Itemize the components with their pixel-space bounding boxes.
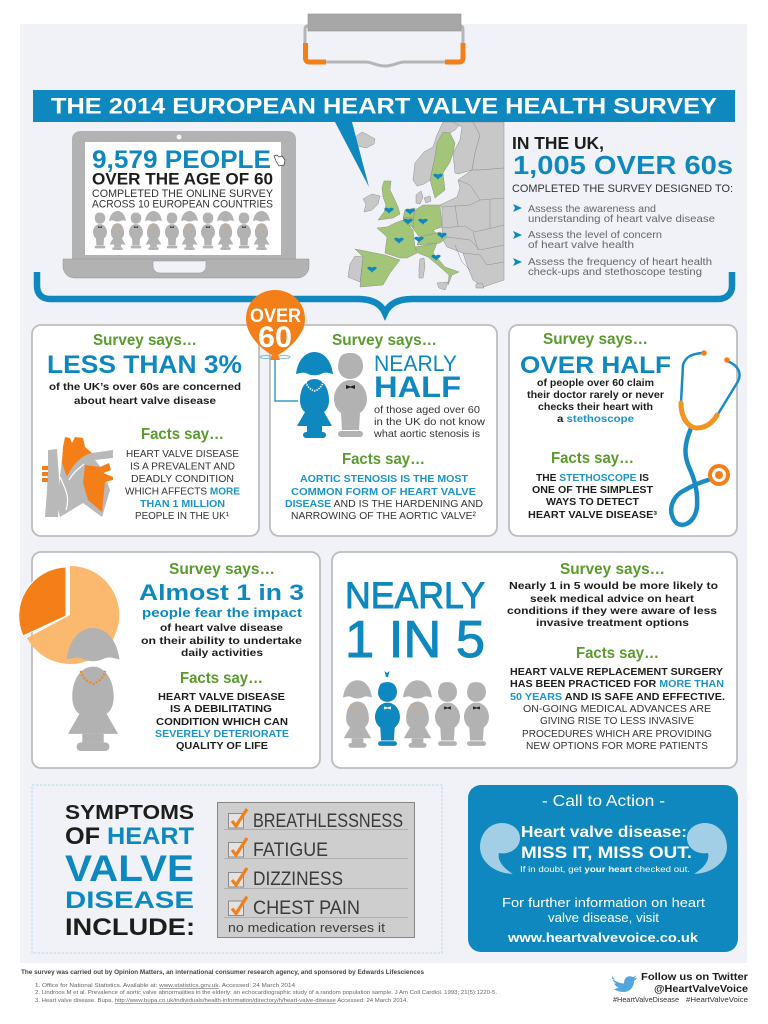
panel: less than 3%: Survey says… xyxy=(93,332,197,349)
text: completed the online survey: COMPLETED THE ONLINE SURVEY xyxy=(92,188,274,200)
panel: call to action: valve disease, visit xyxy=(548,911,660,925)
bullet list of aims: Assess the awareness and xyxy=(528,203,656,215)
panel: less than 3%: of the UK’s over 60s are concerned xyxy=(49,381,241,393)
text: completed the online survey: ACROSS 10 EUROPEAN COUNTRIES xyxy=(92,198,273,210)
panel: almost 1 in 3: HEART VALVE DISEASE xyxy=(158,692,285,703)
panel: almost 1 in 3 xyxy=(32,552,320,768)
heading: symptoms of heart valve disease include: INCLUDE: xyxy=(65,914,195,941)
laptop panel xyxy=(63,131,309,278)
panel: less than 3%: IS A PREVALENT AND xyxy=(130,462,235,472)
panel: over half: OVER HALF xyxy=(520,352,671,379)
footer: survey note and references: The survey was carried out by Opinion Matters, an international consumer research agency, and sponsored by Edwards Lifesciences xyxy=(21,970,425,976)
panel: almost 1 in 3: Almost 1 in 3 xyxy=(139,580,304,605)
panel: over half: WAYS TO DETECT xyxy=(546,497,639,508)
panel: less than 3%: Facts say… xyxy=(141,426,224,443)
icon: clipboard clip xyxy=(305,14,463,66)
panel: nearly half: of those aged over 60 xyxy=(374,404,480,416)
text: UK survey summary: COMPLETED THE SURVEY DESIGNED TO: xyxy=(512,183,733,195)
green countries xyxy=(430,132,455,198)
checklist: BREATHLESSNESS xyxy=(253,811,403,832)
panel: less than 3%: WHICH AFFECTS MORE xyxy=(125,486,240,498)
panel: over half: of people over 60 claim xyxy=(537,377,654,389)
panel: call to action: - Call to Action - xyxy=(542,793,665,810)
panel: nearly half xyxy=(270,325,497,536)
panel: nearly 1 in 5: NEW OPTIONS FOR MORE PATIENTS xyxy=(526,741,708,752)
panel: nearly half: NARROWING OF THE AORTIC VALVE² xyxy=(291,511,477,522)
icon: over 60 balloon: OVER xyxy=(250,306,301,327)
panel: over half: Survey says… xyxy=(543,331,648,348)
panel: less than 3% xyxy=(32,325,259,536)
panel: nearly 1 in 5: Facts say… xyxy=(576,645,659,662)
icon: pointer hand xyxy=(274,155,285,166)
panel: nearly 1 in 5: NEARLY xyxy=(345,575,485,616)
icon: quotation marks xyxy=(480,823,727,874)
panel: nearly 1 in 5: ON-GOING MEDICAL ADVANCES ARE xyxy=(523,704,711,715)
icon: twitter bird xyxy=(612,973,637,992)
bracket linking survey to findings xyxy=(37,272,732,313)
panel: over half: ONE OF THE SIMPLEST xyxy=(532,485,653,496)
panel: symptoms xyxy=(32,785,442,953)
footer: survey note and references: 1. Office for National Statistics. Available at: www.statistics.gov.uk . Accessed: 24 March 2014 xyxy=(35,983,295,989)
bullet list of aims xyxy=(513,203,715,278)
checklist: FATIGUE xyxy=(253,840,328,861)
checklist: CHEST PAIN xyxy=(253,898,360,919)
figure: woman with necklace xyxy=(67,628,119,751)
figures: woman and man xyxy=(296,352,367,438)
heading: 9,579 people: 9,579 PEOPLE xyxy=(92,146,271,174)
panel: nearly half: NEARLY xyxy=(374,351,457,376)
icon: over 60 balloon: 60 xyxy=(258,321,292,354)
panel: over half: Facts say… xyxy=(551,450,634,467)
panel: nearly 1 in 5: invasive treatment options xyxy=(536,617,689,629)
small people row xyxy=(93,211,270,250)
panel: almost 1 in 3: SEVERELY DETERIORATE xyxy=(155,729,289,740)
panel: almost 1 in 3: CONDITION WHICH CAN xyxy=(156,717,288,728)
panel: call to action: If in doubt, get your heart checked out. xyxy=(520,864,690,874)
panel: over half xyxy=(509,325,740,536)
icon: stethoscope xyxy=(671,350,740,525)
text: completed the online survey xyxy=(92,188,274,210)
panel: less than 3%: LESS THAN 3% xyxy=(47,351,242,379)
panel: almost 1 in 3: daily activities xyxy=(181,647,263,659)
title banner with callout tail xyxy=(33,90,735,187)
country borders xyxy=(442,180,504,270)
panel: nearly 1 in 5: conditions if they were aware of less xyxy=(507,605,717,617)
panel: nearly half: COMMON FORM OF HEART VALVE xyxy=(291,487,476,498)
panel: less than 3%: THAN 1 MILLION xyxy=(140,499,225,510)
panel: nearly half: AORTIC STENOSIS IS THE MOST xyxy=(300,474,468,485)
panel: nearly 1 in 5: Nearly 1 in 5 would be more likely to xyxy=(509,580,718,592)
text: UK survey summary: IN THE UK, xyxy=(512,133,604,153)
panel: nearly 1 in 5: PROCEDURES WHICH ARE PROVIDING xyxy=(522,729,712,740)
panel: over half: a stethoscope xyxy=(557,413,634,425)
heading: symptoms of heart valve disease include xyxy=(65,802,195,941)
map of Europe xyxy=(348,122,504,290)
footer: survey note and references: 2. Lindroos M et al. Prevalence of aortic valve abnormalities in the elderly: an echocardiographic study of a random population sample. J Am Coll Cardiol. 1993; 21(5):1220-5. xyxy=(35,990,498,996)
text: UK survey summary xyxy=(512,133,733,278)
checklist xyxy=(218,802,414,938)
panel: almost 1 in 3: QUALITY OF LIFE xyxy=(176,741,268,752)
panel: nearly half: what aortic stenosis is xyxy=(373,428,480,440)
text: follow us on twitter: Follow us on Twitter xyxy=(641,971,748,983)
footer: survey note and references xyxy=(21,970,498,1004)
panel: almost 1 in 3: people fear the impact xyxy=(142,605,303,620)
checklist: no medication reverses it xyxy=(228,920,385,935)
panel: call to action xyxy=(468,785,738,952)
title banner with callout tail: THE 2014 EUROPEAN HEART VALVE HEALTH SURVEY xyxy=(51,94,717,118)
icon: over 60 balloon xyxy=(246,290,305,401)
panel: over half: HEART VALVE DISEASE³ xyxy=(528,510,658,521)
text: follow us on twitter xyxy=(613,971,748,1004)
bullet list of aims: Assess the frequency of heart health xyxy=(528,256,712,268)
text: follow us on twitter: #HeartValveDisease xyxy=(613,995,679,1004)
bullet list of aims: understanding of heart valve disease xyxy=(528,213,715,225)
bullet list of aims: of heart valve health xyxy=(528,239,634,251)
text: follow us on twitter: @HeartValveVoice xyxy=(654,983,748,995)
panel: call to action: MISS IT, MISS OUT. xyxy=(521,843,692,862)
panel: nearly 1 in 5: GIVING RISE TO LESS INVASIVE xyxy=(540,716,694,727)
panel: call to action: For further information on heart xyxy=(502,896,706,910)
panel: almost 1 in 3: on their ability to undertake xyxy=(141,635,302,647)
bullet list of aims: check-ups and stethoscope testing xyxy=(528,266,702,278)
panel: nearly 1 in 5: HAS BEEN PRACTICED FOR MORE THAN xyxy=(510,679,724,690)
panel: almost 1 in 3: Survey says… xyxy=(169,561,275,578)
iceland xyxy=(355,132,375,148)
footer: survey note and references: 3. Heart valve disease. Bupa. http://www.bupa.co.uk/individuals/health-information/directory/h/heart-valve-disease Accessed: 24 March 2014. xyxy=(35,998,409,1004)
text: UK survey summary: 1,005 OVER 60s xyxy=(513,150,733,180)
panel: almost 1 in 3: Facts say… xyxy=(180,670,263,687)
panel: over half: checks their heart with xyxy=(538,401,653,413)
hearts xyxy=(367,174,447,273)
text: follow us on twitter: #HeartValveVoice xyxy=(686,995,748,1004)
pie chart: almost one in three xyxy=(19,566,119,664)
heading: symptoms of heart valve disease include: DISEASE xyxy=(65,887,194,914)
panel: less than 3%: DEADLY CONDITION xyxy=(131,474,234,485)
panel: less than 3%: HEART VALVE DISEASE xyxy=(126,449,239,460)
panel: nearly half: Facts say… xyxy=(342,451,425,468)
panel: almost 1 in 3: of heart valve disease xyxy=(160,622,283,634)
heading: symptoms of heart valve disease include: OF HEART xyxy=(65,823,194,850)
bullet list of aims: Assess the level of concern xyxy=(528,229,662,241)
checklist: DIZZINESS xyxy=(253,869,343,890)
panel: nearly 1 in 5: Survey says… xyxy=(560,561,665,578)
panel: less than 3%: about heart valve disease xyxy=(74,395,216,407)
panel: nearly 1 in 5 xyxy=(332,552,737,768)
icon: anatomical heart xyxy=(42,437,113,517)
panel: less than 3%: PEOPLE IN THE UK¹ xyxy=(135,511,230,522)
panel: call to action: www.heartvalvevoice.co.uk xyxy=(507,931,698,945)
panel: almost 1 in 3: IS A DEBILITATING xyxy=(170,704,272,715)
panel: nearly half: HALF xyxy=(374,371,461,404)
heading: symptoms of heart valve disease include: SYMPTOMS xyxy=(65,802,194,824)
panel: nearly 1 in 5: 50 YEARS AND IS SAFE AND EFFECTIVE. xyxy=(510,692,725,703)
panel: over half: their doctor rarely or never xyxy=(527,389,664,401)
panel: nearly 1 in 5: seek medical advice on heart xyxy=(530,593,695,605)
heading: symptoms of heart valve disease include: VALVE xyxy=(65,848,194,889)
panel: over half: THE STETHOSCOPE IS xyxy=(536,473,649,484)
panel: nearly 1 in 5: 1 IN 5 xyxy=(345,611,485,669)
panel: nearly half: in the UK do not know xyxy=(374,416,485,428)
subheading: over the age of 60: OVER THE AGE OF 60 xyxy=(92,170,273,188)
panel: nearly half: Survey says… xyxy=(332,332,437,349)
figures: five people xyxy=(343,671,489,748)
panel: nearly half: DISEASE AND IS THE HARDENING AND xyxy=(285,499,483,510)
panel: call to action: Heart valve disease: xyxy=(521,824,687,841)
panel: nearly 1 in 5: HEART VALVE REPLACEMENT SURGERY xyxy=(510,667,723,678)
